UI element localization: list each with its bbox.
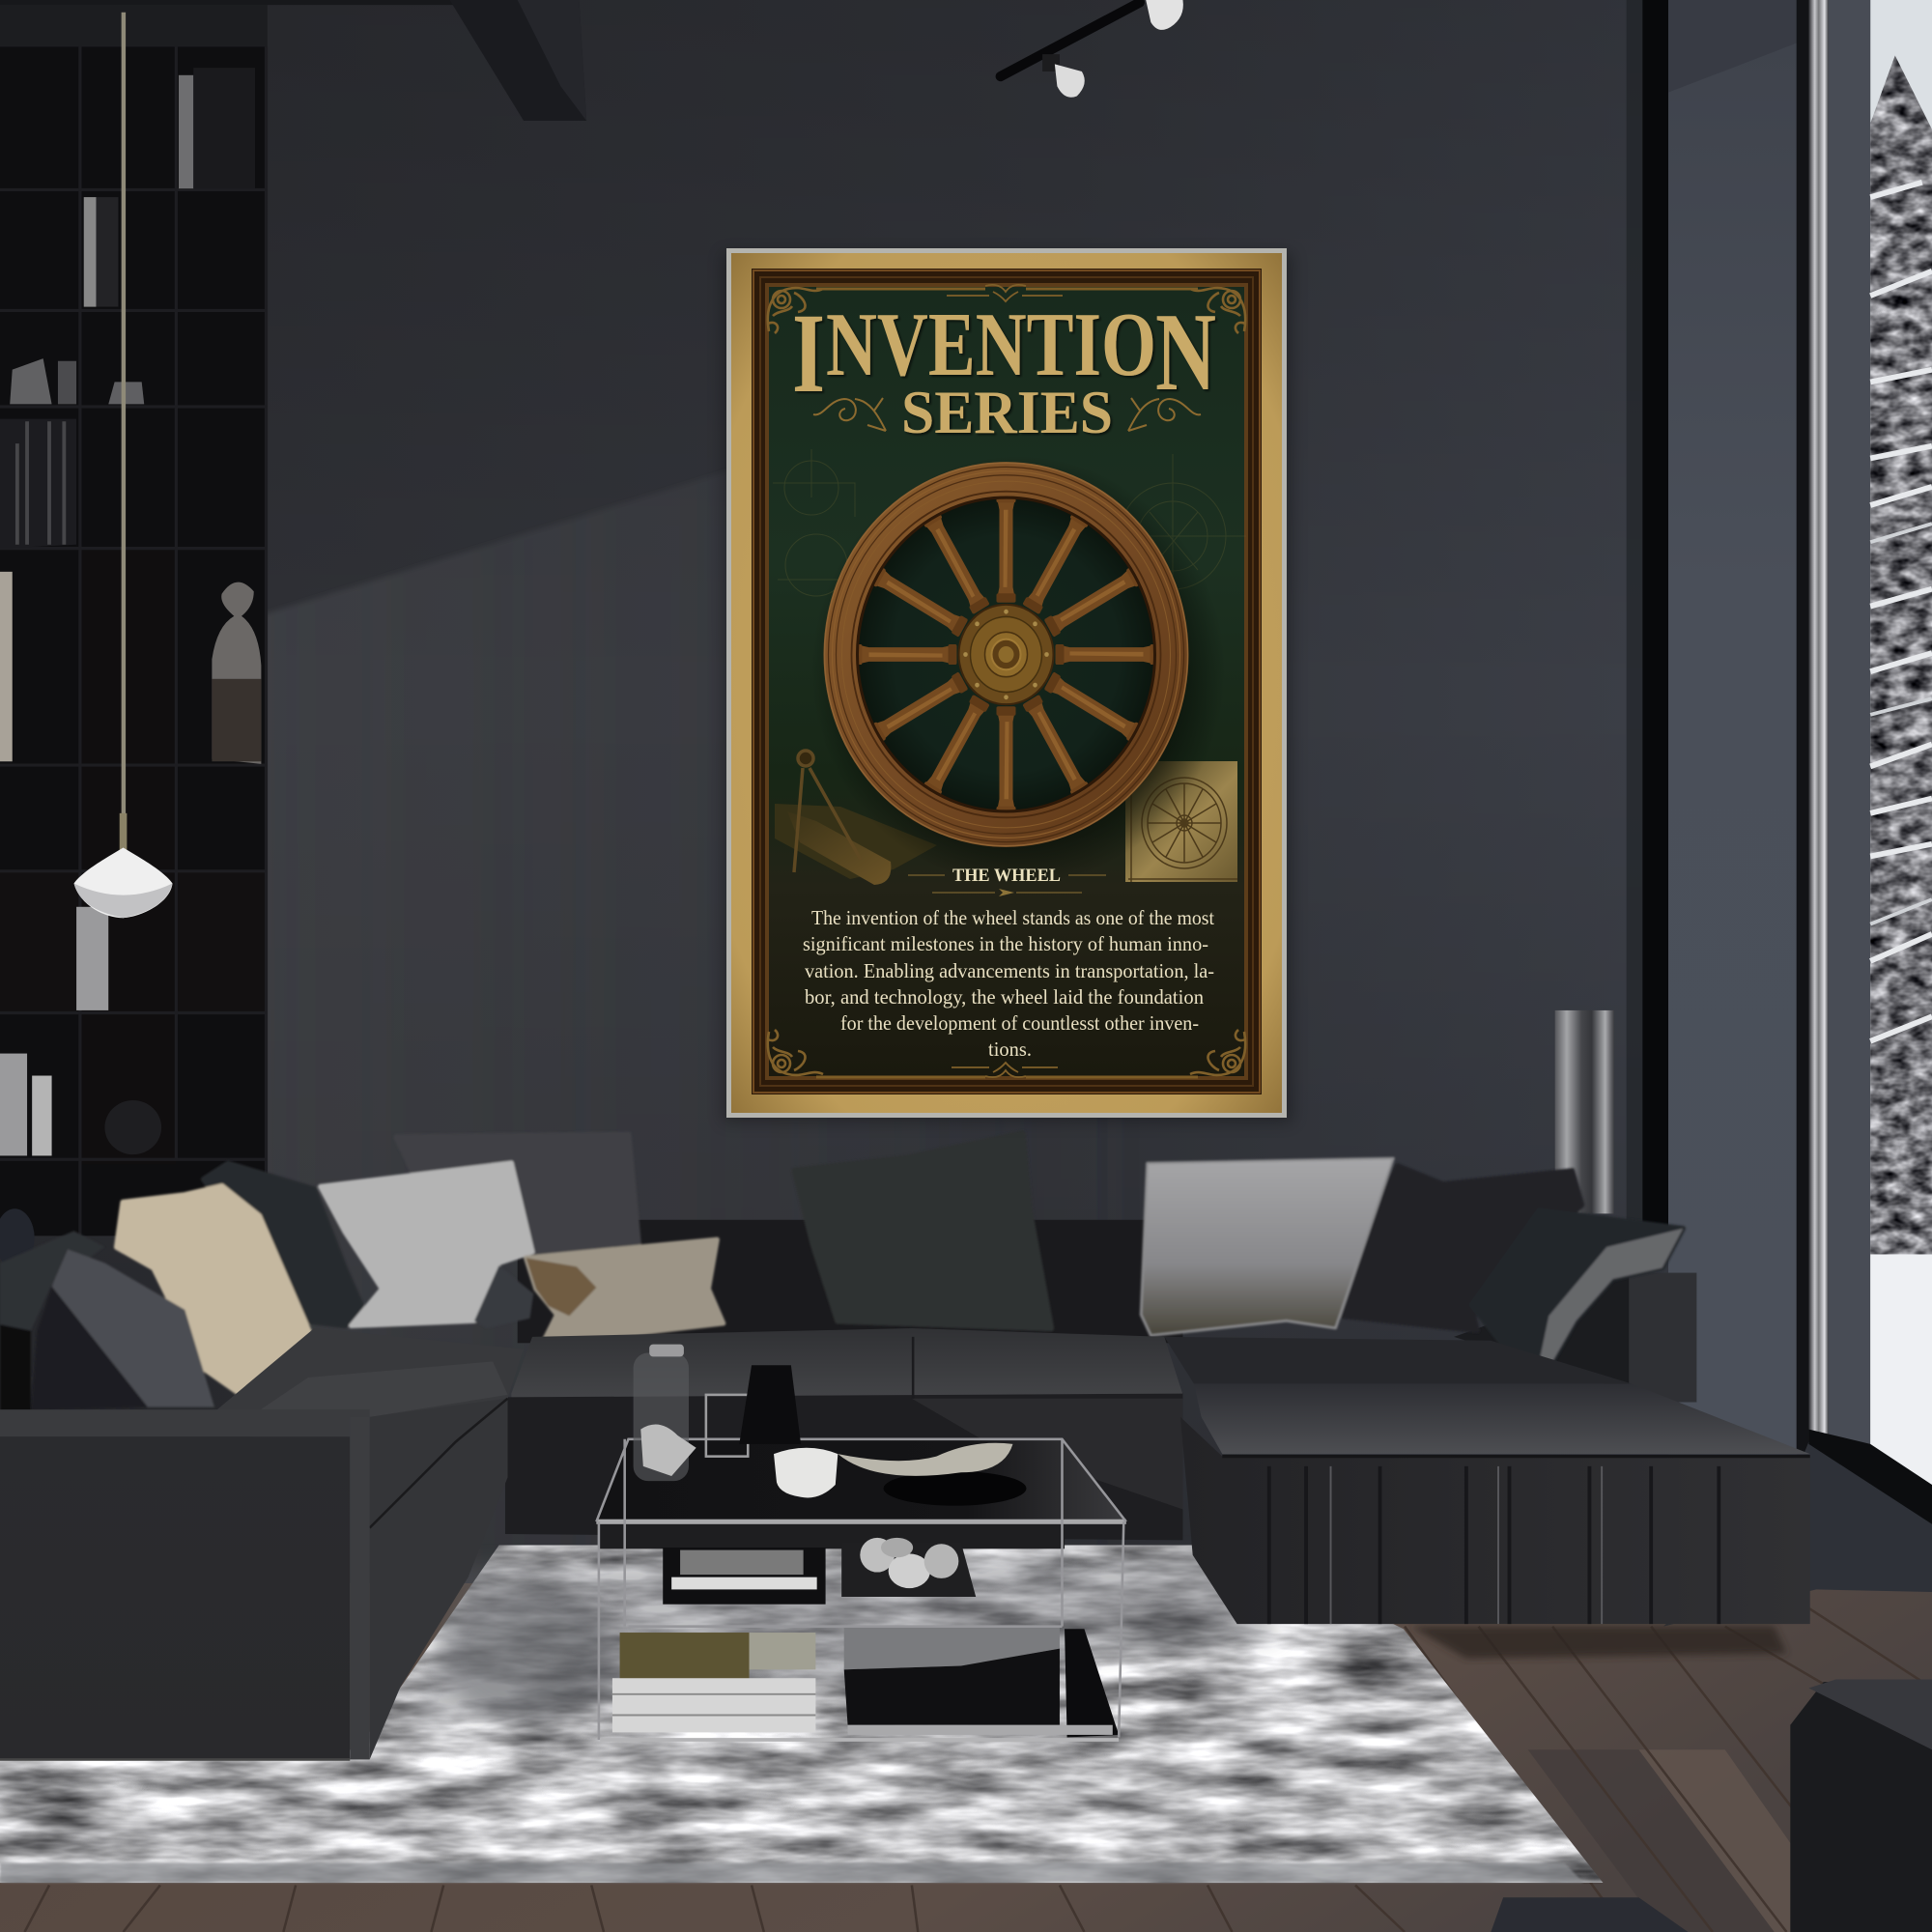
silver vase (1555, 1010, 1614, 1213)
title: SERIES (901, 379, 1113, 446)
rug (0, 1545, 1603, 1883)
gold mat (731, 253, 1282, 1113)
green panel (769, 287, 1244, 1076)
body text: bor, and technology, the wheel laid the foundation (805, 985, 1204, 1009)
cushions on back row (0, 1133, 1683, 1410)
pendant lamp (74, 13, 173, 918)
silver frame (726, 248, 1287, 1118)
ceiling beam (0, 0, 586, 121)
window with snowy tree (1808, 0, 1932, 1521)
wheel (811, 456, 1225, 885)
wheel hub (958, 605, 1053, 704)
parchment scroll (775, 804, 937, 885)
table objects (634, 1345, 1012, 1497)
bookshelf (0, 46, 268, 1267)
faint blueprint sketches (773, 449, 1246, 618)
floor (0, 1430, 1932, 1932)
body text: for the development of countlesst other inven- (840, 1011, 1199, 1035)
dark window column (1627, 0, 1808, 1454)
wheel opening (856, 497, 1155, 812)
title: NVENTIO (826, 295, 1156, 395)
body text: significant milestones in the history of human inno- (803, 932, 1208, 955)
compass (794, 751, 861, 872)
body text: The invention of the wheel stands as one of the most (811, 906, 1214, 929)
centre seat (505, 1328, 1182, 1540)
poster shadow (723, 253, 1293, 1122)
flourish left (813, 398, 886, 431)
body text: tions. (988, 1037, 1032, 1061)
coffee table (596, 1345, 1126, 1740)
body text: vation. Enabling advancements in transportation, la- (805, 959, 1214, 982)
foreground ottoman (1790, 1680, 1932, 1932)
title: I (792, 290, 825, 416)
corner ornaments (768, 285, 1245, 1077)
title (792, 290, 1216, 446)
border bands (752, 269, 1262, 1094)
left sofa section (0, 1328, 524, 1759)
wheel rim (825, 463, 1188, 846)
subtitle (908, 866, 1106, 896)
poster (723, 248, 1293, 1122)
title: N (1155, 291, 1216, 414)
subtitle: THE WHEEL (952, 866, 1061, 886)
sofa back (518, 1220, 1696, 1403)
wheel spokes (854, 494, 1159, 815)
light patch on wall (251, 338, 1159, 1662)
body text (803, 906, 1214, 1061)
right chaise (1164, 1337, 1810, 1624)
track lights (1001, 0, 1183, 98)
wheel shadow (811, 456, 1225, 885)
blueprint card (1125, 761, 1237, 882)
flourish right (1128, 398, 1201, 431)
